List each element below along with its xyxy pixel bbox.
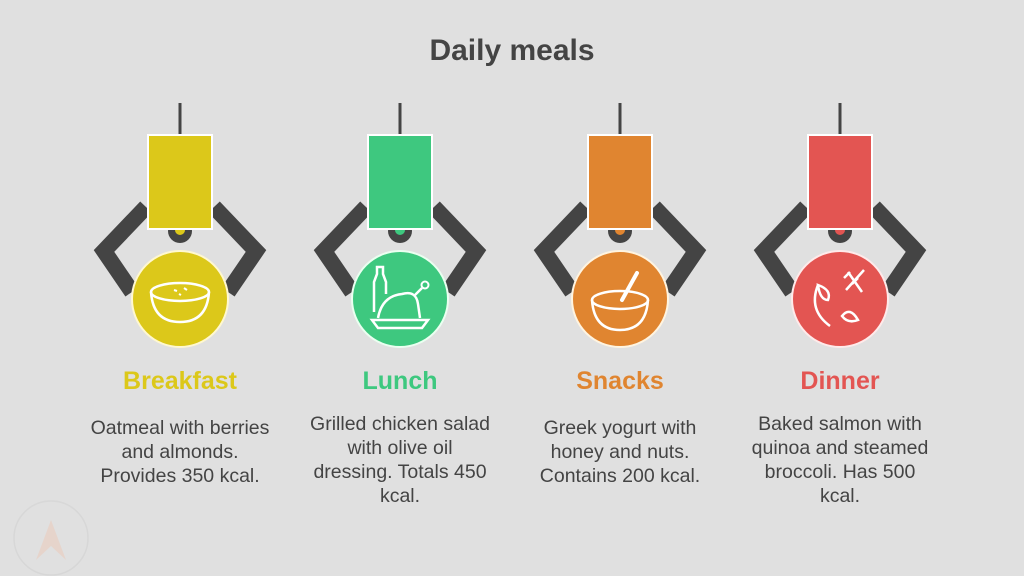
title: Daily meals bbox=[429, 34, 595, 67]
logo watermark bbox=[14, 501, 88, 575]
description: with olive oil bbox=[346, 437, 453, 459]
icon: chicken plate bbox=[352, 251, 448, 347]
column: snacks bbox=[540, 103, 700, 487]
description: dressing. Totals 450 bbox=[313, 461, 487, 483]
description: honey and nuts. bbox=[551, 441, 689, 463]
description: Provides 350 kcal. bbox=[100, 465, 260, 487]
description: kcal. bbox=[820, 485, 860, 507]
description: kcal. bbox=[380, 485, 420, 507]
icon: yogurt bowl bbox=[572, 251, 668, 347]
label: Breakfast bbox=[123, 367, 238, 395]
label: Snacks bbox=[576, 367, 664, 395]
icon: salmon plate bbox=[792, 251, 888, 347]
description: Grilled chicken salad bbox=[310, 413, 490, 435]
description: broccoli. Has 500 bbox=[765, 461, 915, 483]
description: and almonds. bbox=[121, 441, 239, 463]
description: Greek yogurt with bbox=[544, 417, 696, 439]
description: Contains 200 kcal. bbox=[540, 465, 700, 487]
column: breakfast bbox=[91, 103, 270, 487]
description: Oatmeal with berries bbox=[91, 417, 270, 439]
label: Dinner bbox=[800, 367, 880, 395]
column: dinner bbox=[752, 103, 928, 507]
description: Baked salmon with bbox=[758, 413, 922, 435]
description: quinoa and steamed bbox=[752, 437, 928, 459]
label: Lunch bbox=[362, 367, 438, 395]
column: lunch bbox=[310, 103, 490, 507]
icon: bowl bbox=[132, 251, 228, 347]
